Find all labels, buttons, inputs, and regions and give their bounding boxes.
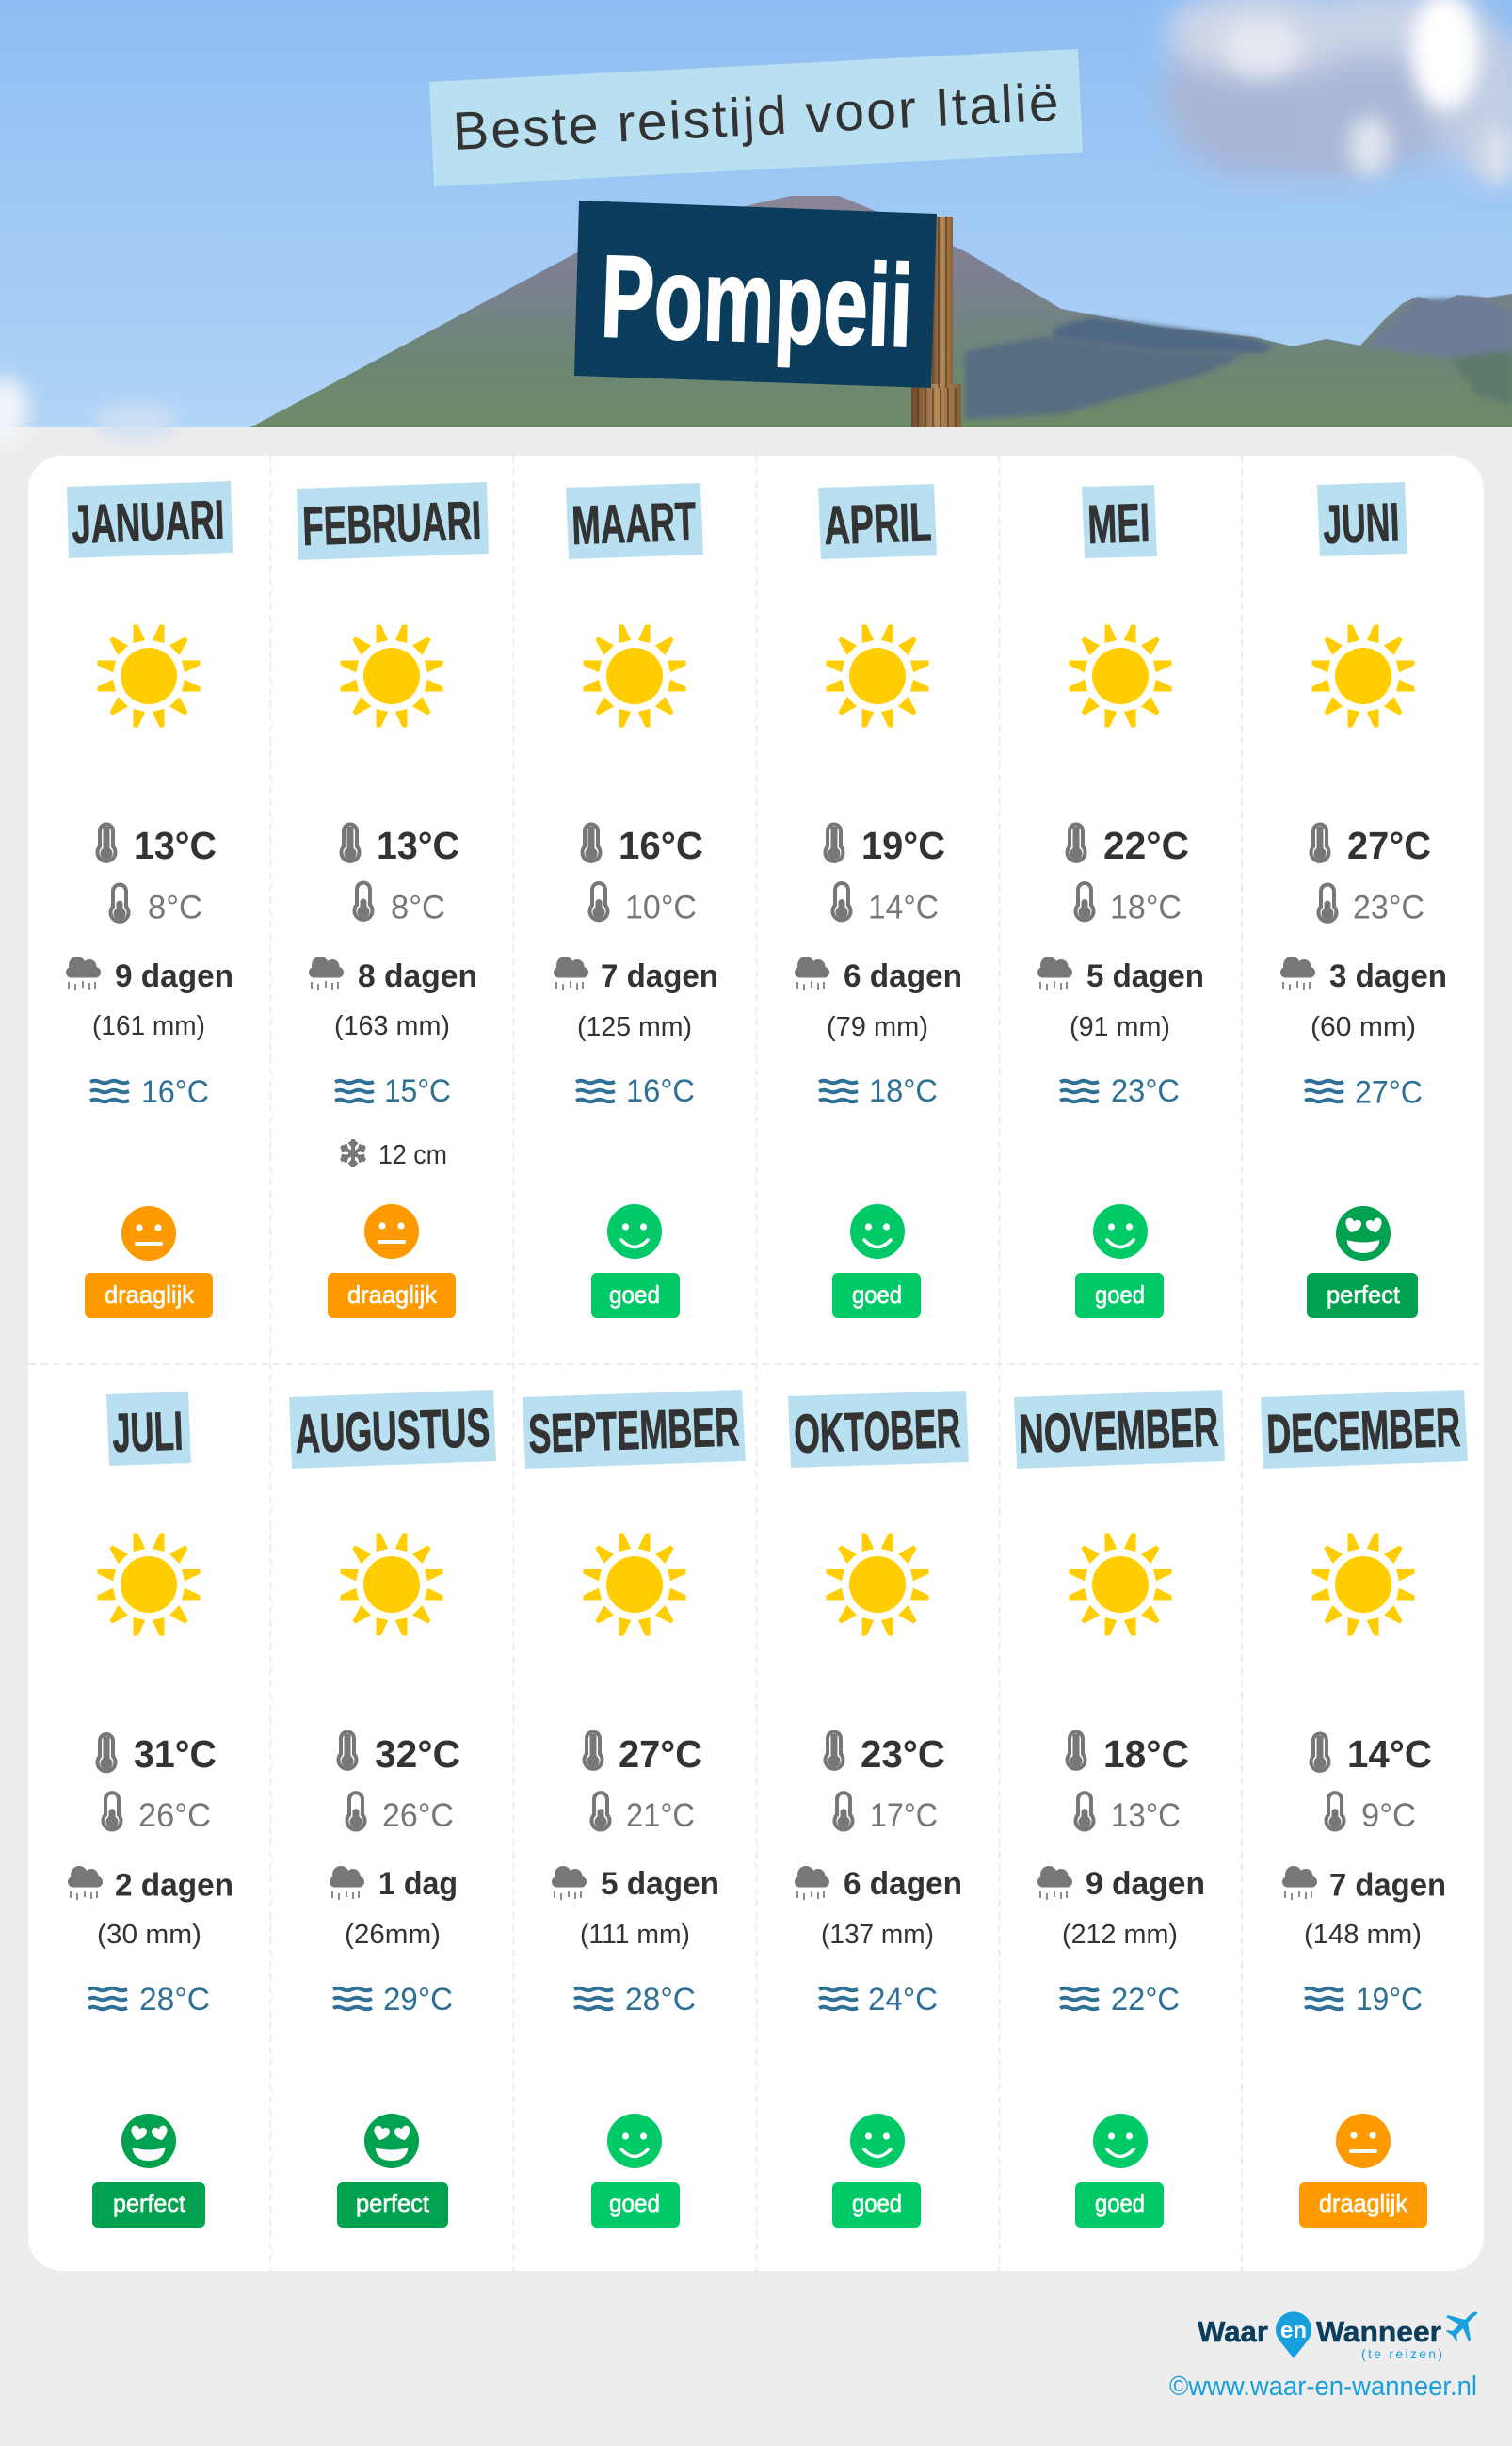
sea temperature: 16°C xyxy=(626,1073,695,1109)
heading: mei: MEI xyxy=(1086,492,1150,555)
panel: climate table xyxy=(28,456,1484,2271)
high temperature: 19°C xyxy=(861,824,945,867)
sea temperature: 24°C xyxy=(868,1982,938,2018)
rainfall: (30 mm) xyxy=(97,1920,201,1950)
low temperature xyxy=(111,885,202,926)
low temperature: 14°C xyxy=(868,889,939,926)
icon: sun xyxy=(1070,1533,1171,1636)
low temperature xyxy=(354,883,445,926)
month: februari xyxy=(297,482,489,1318)
heading: september: SEPTEMBER xyxy=(527,1396,740,1465)
rating face xyxy=(364,2114,419,2168)
rain days xyxy=(68,1866,233,1904)
high temperature xyxy=(341,824,459,867)
rainfall: (163 mm) xyxy=(334,1011,450,1041)
rating badge xyxy=(1075,1273,1164,1318)
month: mei xyxy=(1037,485,1204,1318)
sea temperature xyxy=(574,1982,696,2018)
high temperature: 18°C xyxy=(1103,1732,1189,1776)
low temperature: 9°C xyxy=(1361,1797,1416,1834)
rainfall: (148 mm) xyxy=(1304,1920,1422,1950)
sea temperature xyxy=(1060,1073,1180,1109)
rating badge: goed xyxy=(1095,2189,1145,2217)
high temperature xyxy=(1068,1732,1189,1776)
heading: oktober xyxy=(788,1391,969,1468)
rain days: 3 dagen xyxy=(1329,958,1447,994)
heading: maart xyxy=(566,483,703,559)
rating badge: goed xyxy=(852,2189,902,2217)
low temperature: 13°C xyxy=(1111,1797,1181,1834)
title banner: Beste reistijd voor Italië xyxy=(452,72,1060,162)
month: december xyxy=(1261,1390,1468,2228)
rain days xyxy=(66,957,233,994)
low temperature: 17°C xyxy=(870,1797,938,1834)
month: oktober xyxy=(788,1391,969,2228)
sea temperature xyxy=(819,1982,938,2018)
icon: sun xyxy=(827,1533,928,1636)
low temperature: 10°C xyxy=(625,889,697,926)
heading: november: NOVEMBER xyxy=(1018,1397,1219,1465)
sea temperature xyxy=(576,1073,695,1109)
high temperature: 31°C xyxy=(134,1732,217,1776)
icon: sun xyxy=(827,625,928,727)
heading: april xyxy=(818,484,937,559)
low temperature xyxy=(589,883,697,926)
rainfall: (137 mm) xyxy=(821,1920,934,1950)
rating badge: goed xyxy=(852,1280,902,1309)
website link: ©www.waar-en-wanneer.nl xyxy=(1169,2372,1477,2402)
rain days xyxy=(330,1866,458,1902)
high temperature: 13°C xyxy=(377,824,459,867)
rain days: 7 dagen xyxy=(601,958,718,994)
high temperature xyxy=(825,824,945,867)
low temperature: 18°C xyxy=(1110,889,1182,926)
sea temperature: 29°C xyxy=(383,1982,453,2018)
heading: november xyxy=(1014,1390,1225,1469)
high temperature: 16°C xyxy=(619,824,703,867)
rating face xyxy=(1336,2114,1391,2168)
low temperature: 23°C xyxy=(1353,889,1424,926)
icon: sun xyxy=(584,1533,685,1636)
rating badge xyxy=(1307,1273,1418,1318)
sea temperature: 18°C xyxy=(869,1073,938,1109)
rating face xyxy=(850,2114,905,2168)
rating badge: goed xyxy=(609,2189,660,2217)
rating badge: draaglijk xyxy=(347,1280,438,1309)
rain days xyxy=(795,1866,962,1902)
rating badge xyxy=(328,1273,456,1318)
rating face xyxy=(1093,1204,1148,1259)
icon: sun xyxy=(98,625,200,727)
rain days: 6 dagen xyxy=(844,1866,962,1902)
icon: sun xyxy=(1312,625,1414,727)
rain days xyxy=(1282,1866,1446,1904)
heading: augustus xyxy=(289,1390,496,1469)
heading: juni xyxy=(1317,482,1407,556)
icon: map pin: en xyxy=(1280,2318,1307,2343)
icon: sun xyxy=(584,625,685,727)
icon: sun xyxy=(98,1533,200,1636)
rain days xyxy=(554,957,718,994)
rain days xyxy=(795,957,962,994)
rating badge xyxy=(1299,2182,1427,2228)
rating badge xyxy=(1075,2182,1164,2228)
rating face xyxy=(607,2114,662,2168)
high temperature xyxy=(339,1732,460,1776)
rating face xyxy=(1336,1206,1391,1261)
heading: september xyxy=(523,1390,746,1469)
high temperature: 23°C xyxy=(861,1732,945,1776)
month: juni xyxy=(1280,482,1447,1318)
sea temperature xyxy=(88,1982,210,2018)
rating badge: perfect xyxy=(1327,1280,1401,1309)
heading: juli: JULI xyxy=(111,1400,184,1464)
logo: Waar en Wanneer: Waar xyxy=(1198,2315,1268,2348)
title banner xyxy=(429,49,1083,186)
icon: map pin xyxy=(1276,2311,1311,2358)
low temperature xyxy=(104,1793,211,1834)
month: september xyxy=(523,1390,746,2228)
rain days: 1 dag xyxy=(378,1866,458,1902)
rating badge: perfect xyxy=(113,2189,186,2217)
sea temperature xyxy=(1305,1075,1423,1111)
low temperature xyxy=(346,1793,454,1834)
heading: februari: FEBRUARI xyxy=(301,490,482,557)
heading: januari xyxy=(67,481,233,558)
high temperature: 27°C xyxy=(619,1732,702,1776)
rain days: 6 dagen xyxy=(844,958,962,994)
logo: Waar en Wanneer xyxy=(1198,2311,1477,2361)
rating face xyxy=(121,1206,176,1261)
rating face xyxy=(364,1204,419,1259)
sea temperature: 27°C xyxy=(1355,1075,1423,1111)
sea temperature: 16°C xyxy=(141,1074,209,1110)
month: januari xyxy=(66,481,233,1318)
logo: Waar en Wanneer: Wanneer xyxy=(1316,2315,1441,2348)
heading: mei xyxy=(1082,485,1157,558)
rating face xyxy=(1093,2114,1148,2168)
rainfall: (79 mm) xyxy=(827,1012,928,1042)
icon: airplane xyxy=(1446,2312,1477,2341)
sea temperature: 23°C xyxy=(1111,1073,1180,1109)
rain days: 5 dagen xyxy=(601,1866,719,1902)
rating badge xyxy=(591,2182,680,2228)
icon: sun xyxy=(341,625,442,727)
rainfall: (91 mm) xyxy=(1070,1012,1170,1042)
high temperature xyxy=(582,824,703,867)
high temperature xyxy=(1311,824,1431,867)
heading: februari xyxy=(297,482,489,560)
high temperature xyxy=(98,1732,217,1776)
heading: oktober: OKTOBER xyxy=(793,1398,961,1465)
sea temperature xyxy=(1305,1982,1423,2018)
month: november xyxy=(1014,1390,1225,2228)
low temperature xyxy=(834,1793,938,1834)
high temperature: 14°C xyxy=(1347,1732,1432,1776)
icon: sun xyxy=(1070,625,1171,727)
rain days xyxy=(1037,957,1204,994)
high temperature xyxy=(98,824,217,867)
sea temperature: 22°C xyxy=(1111,1982,1180,2018)
month: maart xyxy=(554,483,718,1318)
rating badge xyxy=(591,1273,680,1318)
rainfall: (111 mm) xyxy=(580,1920,690,1950)
high temperature xyxy=(584,1732,702,1776)
month: augustus xyxy=(289,1390,496,2228)
rating badge: perfect xyxy=(356,2189,430,2217)
high temperature: 22°C xyxy=(1103,824,1189,867)
heading: maart: MAART xyxy=(571,491,697,556)
high temperature: 13°C xyxy=(134,824,217,867)
low temperature: 26°C xyxy=(138,1797,211,1834)
sea temperature xyxy=(90,1074,209,1110)
low temperature: 8°C xyxy=(148,889,202,926)
rain days xyxy=(309,957,477,994)
sea temperature: 28°C xyxy=(139,1982,210,2018)
destination banner: Pompeii xyxy=(599,232,914,372)
sea temperature xyxy=(819,1073,938,1109)
sea temperature xyxy=(333,1982,453,2018)
rain days: 9 dagen xyxy=(1086,1866,1205,1902)
rain days: 5 dagen xyxy=(1086,958,1204,994)
month: april xyxy=(795,484,962,1318)
low temperature: 8°C xyxy=(391,889,445,926)
rainfall: (26mm) xyxy=(345,1920,441,1950)
rating badge xyxy=(85,1273,213,1318)
rating badge: draaglijk xyxy=(105,1280,195,1309)
sea temperature: 19°C xyxy=(1356,1982,1423,2018)
rating badge xyxy=(832,2182,921,2228)
rating face xyxy=(121,2114,176,2168)
icon: sun xyxy=(341,1533,442,1636)
rain days: 2 dagen xyxy=(115,1868,233,1904)
snowfall xyxy=(339,1139,447,1170)
sea temperature xyxy=(335,1073,451,1109)
sea temperature: 15°C xyxy=(384,1073,451,1109)
rating badge: goed xyxy=(609,1280,660,1309)
rain days: 9 dagen xyxy=(115,958,233,994)
rainfall: (60 mm) xyxy=(1311,1012,1416,1042)
snowfall: 12 cm xyxy=(378,1140,447,1170)
low temperature xyxy=(832,883,939,926)
rainfall: (125 mm) xyxy=(577,1012,692,1042)
high temperature: 27°C xyxy=(1347,824,1431,867)
low temperature xyxy=(591,1793,695,1834)
low temperature: 26°C xyxy=(382,1797,454,1834)
rating badge xyxy=(337,2182,448,2228)
rating face xyxy=(607,1204,662,1259)
rain days: 8 dagen xyxy=(358,958,477,994)
high temperature xyxy=(825,1732,945,1776)
low temperature xyxy=(1326,1793,1416,1834)
low temperature xyxy=(1075,883,1182,926)
rain days: 7 dagen xyxy=(1329,1868,1446,1904)
heading: april: APRIL xyxy=(823,491,932,556)
logo: Waar en Wanneer: (te reizen) xyxy=(1361,2346,1442,2361)
rating face xyxy=(850,1204,905,1259)
month: juli xyxy=(68,1392,233,2228)
sea temperature: 28°C xyxy=(625,1982,696,2018)
rainfall: (161 mm) xyxy=(92,1011,205,1041)
rating badge xyxy=(832,1273,921,1318)
sea temperature xyxy=(1060,1982,1180,2018)
heading: januari: JANUARI xyxy=(71,489,225,555)
rain days xyxy=(1280,957,1447,994)
rating badge: draaglijk xyxy=(1319,2189,1408,2217)
high temperature: 32°C xyxy=(375,1732,460,1776)
rain days xyxy=(552,1866,719,1902)
header photo: Vesuvius and column xyxy=(0,0,1512,442)
rating badge: goed xyxy=(1095,1280,1145,1309)
high temperature xyxy=(1068,824,1189,867)
heading: augustus: AUGUSTUS xyxy=(294,1397,491,1465)
heading: juli xyxy=(106,1392,191,1466)
high temperature xyxy=(1311,1732,1432,1776)
rainfall: (212 mm) xyxy=(1062,1920,1178,1950)
icon: sun xyxy=(1312,1533,1414,1636)
low temperature xyxy=(1318,885,1424,926)
heading: juni: JUNI xyxy=(1322,491,1400,555)
low temperature: 21°C xyxy=(626,1797,695,1834)
rating badge xyxy=(92,2182,205,2228)
low temperature xyxy=(1075,1793,1181,1834)
destination banner xyxy=(574,201,937,388)
